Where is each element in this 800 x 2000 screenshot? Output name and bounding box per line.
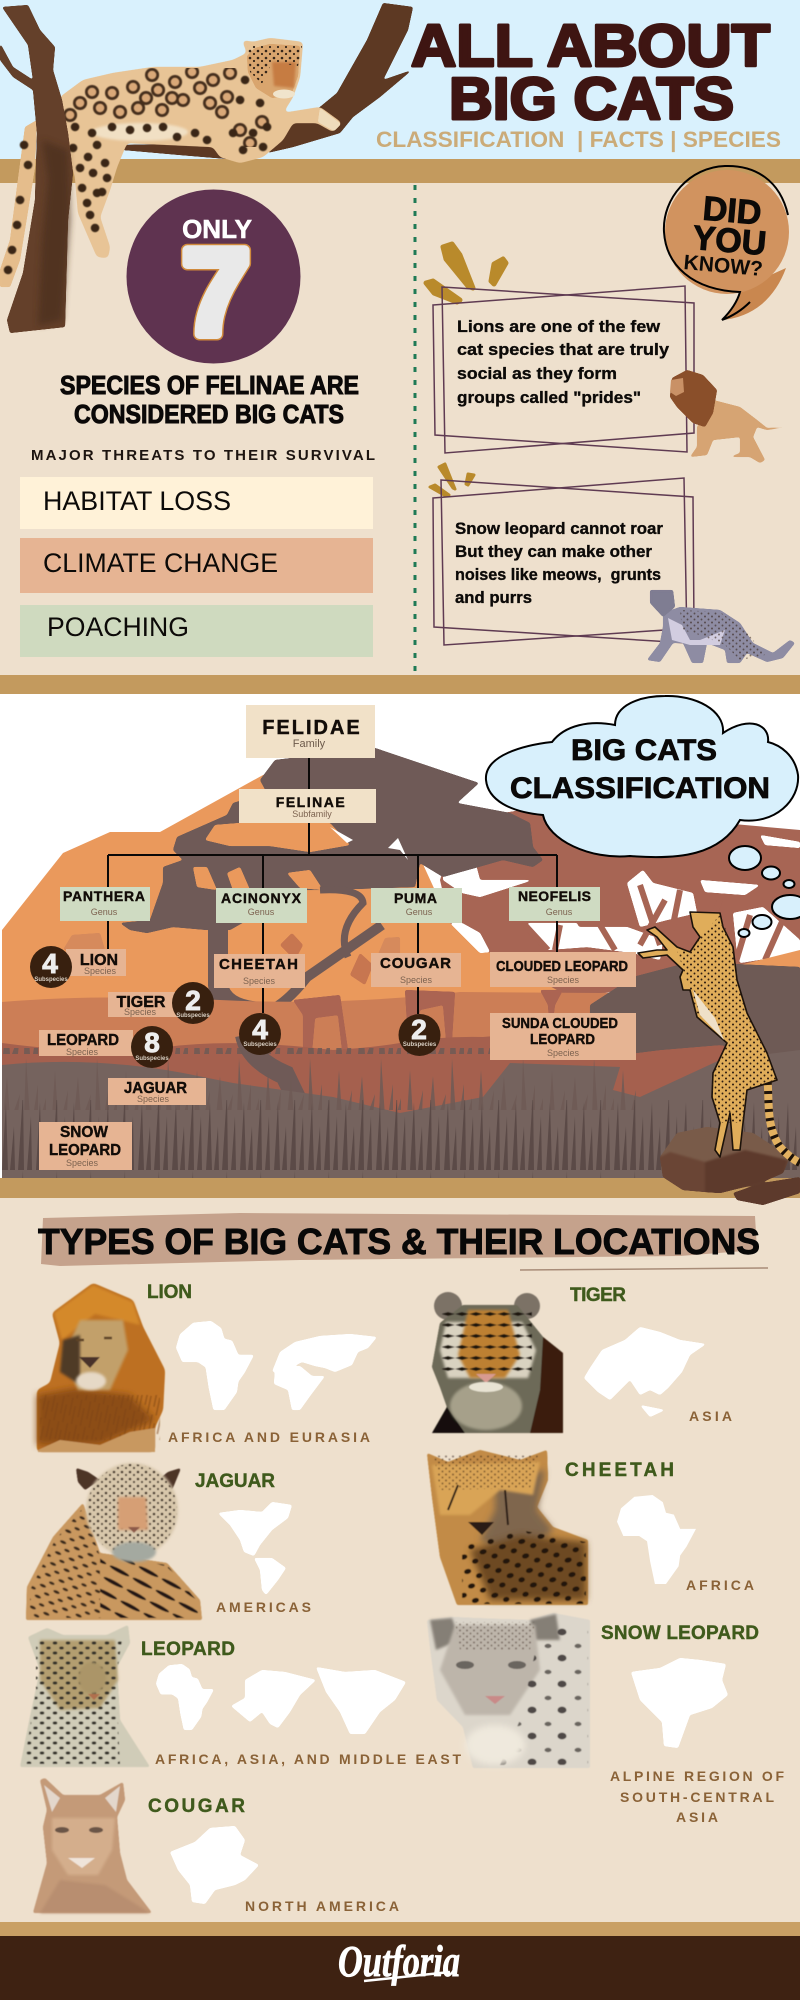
node: felinae: Subfamily (292, 809, 332, 819)
location: ASIA (689, 1408, 732, 1424)
callout: did you know: KNOW? (683, 251, 764, 281)
subspecies badge: lion (30, 946, 72, 988)
thought cloud: big cats classification (486, 696, 798, 857)
subspecies badge: cougar (398, 1014, 440, 1056)
species: clouded leopard: CLOUDED LEOPARD (496, 958, 628, 975)
callout: did you know: DID (701, 190, 763, 233)
species: lion (66, 949, 126, 976)
threat: habitat loss (20, 477, 373, 529)
species: lion: LION (80, 952, 118, 969)
species: snow leopard (39, 1122, 132, 1170)
subspecies badge: tiger: Subspecies (176, 1013, 210, 1019)
thought cloud: big cats classification: CLASSIFICATION (510, 772, 770, 805)
subspecies badge: cheetah (239, 1013, 281, 1055)
threat: climate change: CLIMATE CHANGE (43, 548, 278, 578)
band mid (0, 675, 800, 694)
title: ALL ABOUT (411, 13, 770, 79)
decoration: splash two (430, 464, 474, 495)
photo: tiger (432, 1292, 563, 1433)
heading: species of felinae: SPECIES OF FELINAE ARE (60, 370, 359, 400)
species card: cheetah (427, 1450, 754, 1605)
node: felidae: FELIDAE (262, 717, 362, 739)
location: AFRICA AND EURASIA (168, 1429, 370, 1445)
map (218, 1502, 292, 1595)
band footer (0, 1922, 800, 1936)
species: clouded leopard (490, 952, 636, 987)
location: NORTH AMERICA (245, 1898, 399, 1914)
node: panthera: Genus (91, 907, 118, 917)
node: panthera (60, 887, 150, 921)
subspecies badge: tiger: 2 (185, 985, 201, 1016)
location: ASIA (676, 1809, 718, 1825)
fact box: lions: groups called "prides" (457, 388, 641, 407)
species: sunda clouded leopard: SUNDA CLOUDED (502, 1015, 618, 1032)
callout: did you know (664, 166, 789, 320)
location (610, 1768, 784, 1825)
location: ALPINE REGION OF (610, 1768, 784, 1784)
illustration: snow leopard (647, 590, 795, 663)
location: AMERICAS (216, 1599, 311, 1615)
subspecies badge: tiger (172, 982, 214, 1024)
stat circle: only 7: 7 (182, 224, 250, 360)
species card: tiger (432, 1285, 732, 1433)
illustration: cheetah standing (638, 912, 800, 1163)
species card: snow leopard (427, 1613, 784, 1825)
stat circle: only 7 (126, 190, 300, 364)
fact box: snow leopard: and purrs (455, 588, 532, 607)
species card: lion (37, 1282, 377, 1452)
header band (0, 159, 800, 183)
species: cheetah (214, 954, 305, 988)
thought bubbles (729, 846, 800, 937)
subspecies badge: leopard: 8 (144, 1027, 160, 1058)
heading: types of big cats: TYPES OF BIG CATS & THEIR LOCATIONS (38, 1221, 760, 1262)
photo: leopard (20, 1625, 150, 1767)
species: snow leopard: LEOPARD (49, 1142, 121, 1159)
node: neofelis (509, 887, 600, 921)
name: LEOPARD (141, 1639, 235, 1660)
name: LION (147, 1282, 192, 1303)
map (176, 1321, 377, 1410)
species: sunda clouded leopard: Species (547, 1048, 580, 1058)
threat: climate change (20, 538, 373, 593)
fact box: lions (433, 286, 694, 453)
node: neofelis: NEOFELIS (518, 888, 591, 904)
species card: cougar (33, 1778, 399, 1914)
node: panthera: PANTHERA (63, 888, 145, 904)
footer: Outforia (338, 1937, 460, 1986)
subspecies badge: cougar: Subspecies (403, 1042, 437, 1048)
species: clouded leopard: Species (547, 975, 580, 985)
species: cougar: Species (400, 975, 433, 985)
name: COUGAR (148, 1796, 245, 1817)
panel: header sky (0, 0, 800, 160)
illustration: rock (660, 1127, 800, 1205)
title: BIG CATS (449, 66, 734, 132)
location: AFRICA, ASIA, AND MIDDLE EAST (155, 1751, 461, 1767)
title (411, 13, 770, 132)
node: acinonyx: Genus (248, 907, 275, 917)
stat circle: only 7: ONLY (182, 214, 252, 244)
subspecies badge: cougar: 2 (411, 1014, 427, 1045)
node: felinae: FELINAE (276, 794, 346, 810)
species card: leopard (20, 1625, 461, 1767)
species: lion: Species (84, 966, 117, 976)
node: felidae: Family (293, 738, 326, 750)
subspecies badge: cheetah: Subspecies (243, 1042, 277, 1048)
fact box: lions: Lions are one of the few (457, 317, 661, 336)
species: sunda clouded leopard (490, 1013, 636, 1060)
species: sunda clouded leopard: LEOPARD (530, 1031, 595, 1048)
map (617, 1495, 696, 1584)
node: puma: PUMA (394, 890, 437, 906)
threat: poaching (20, 605, 373, 657)
map (170, 1826, 259, 1904)
species: cougar (371, 953, 461, 987)
species card: jaguar (26, 1463, 311, 1620)
photo: lion (37, 1283, 165, 1452)
photo: cougar (33, 1778, 152, 1913)
map (584, 1327, 706, 1417)
location: AFRICA (686, 1577, 754, 1593)
footer (0, 1936, 800, 2000)
species: jaguar: Species (137, 1094, 170, 1104)
species: jaguar (108, 1078, 206, 1105)
heading: major threats: MAJOR THREATS TO THEIR SURVIVAL (31, 447, 375, 464)
node: acinonyx: ACINONYX (221, 890, 302, 906)
illustration: leopard on tree (0, 3, 413, 333)
species: cougar: COUGAR (380, 955, 451, 972)
node: felinae (239, 789, 376, 823)
species: tiger: TIGER (117, 994, 166, 1011)
panel: classification scene (0, 694, 800, 1178)
map (156, 1664, 406, 1734)
node: puma (371, 888, 462, 923)
subspecies badge: lion: 4 (42, 948, 58, 979)
threat: habitat loss: HABITAT LOSS (43, 486, 231, 516)
species: leopard: LEOPARD (47, 1032, 119, 1049)
node: neofelis: Genus (546, 907, 573, 917)
species: tiger: Species (124, 1007, 157, 1017)
species: jaguar: JAGUAR (124, 1080, 187, 1097)
subspecies badge: leopard (131, 1026, 173, 1068)
photo: cheetah (427, 1450, 588, 1605)
location: SOUTH-CENTRAL (620, 1789, 774, 1805)
node: felidae (246, 705, 375, 758)
fact box: snow leopard: But they can make other (455, 542, 652, 561)
species: cheetah: CHEETAH (219, 956, 298, 973)
species: leopard: Species (66, 1047, 99, 1057)
illustration: lion (670, 370, 783, 463)
heading: species of felinae: CONSIDERED BIG CATS (74, 399, 344, 429)
callout: did you know: YOU (691, 219, 768, 263)
fact box: snow leopard (433, 478, 694, 645)
threat: poaching: POACHING (47, 612, 189, 642)
stat circle: only 7: 7 (182, 224, 250, 360)
subspecies badge: leopard: Subspecies (135, 1056, 169, 1062)
species: snow leopard: SNOW (60, 1124, 109, 1141)
tree connector lines (108, 758, 557, 1014)
species: leopard (39, 1030, 133, 1057)
species: cheetah: Species (243, 976, 276, 986)
species: snow leopard: Species (66, 1158, 99, 1168)
decoration: splash one (426, 244, 506, 302)
subtitle: CLASSIFICATION | FACTS | SPECIES (376, 127, 781, 152)
name: TIGER (570, 1285, 626, 1306)
heading: species of felinae (60, 370, 359, 429)
node: puma: Genus (406, 907, 433, 917)
photo: jaguar (26, 1463, 202, 1620)
subspecies badge: cheetah: 4 (252, 1014, 268, 1045)
band lower (0, 1178, 800, 1198)
subspecies badge: lion: Subspecies (34, 977, 68, 983)
name: CHEETAH (565, 1460, 674, 1481)
photo: snow leopard (427, 1613, 590, 1768)
fact box: lions: social as they form (457, 364, 617, 383)
fact box: snow leopard: Snow leopard cannot roar (455, 519, 663, 538)
name: SNOW LEOPARD (601, 1623, 759, 1644)
species: tiger (108, 992, 178, 1017)
fact box: lions: cat species that are truly (457, 340, 670, 359)
node: acinonyx (216, 888, 307, 923)
fact box: snow leopard: noises like meows, grunts (455, 565, 661, 584)
name: JAGUAR (195, 1471, 275, 1492)
map (631, 1658, 728, 1748)
thought cloud: big cats classification: BIG CATS (571, 734, 717, 767)
